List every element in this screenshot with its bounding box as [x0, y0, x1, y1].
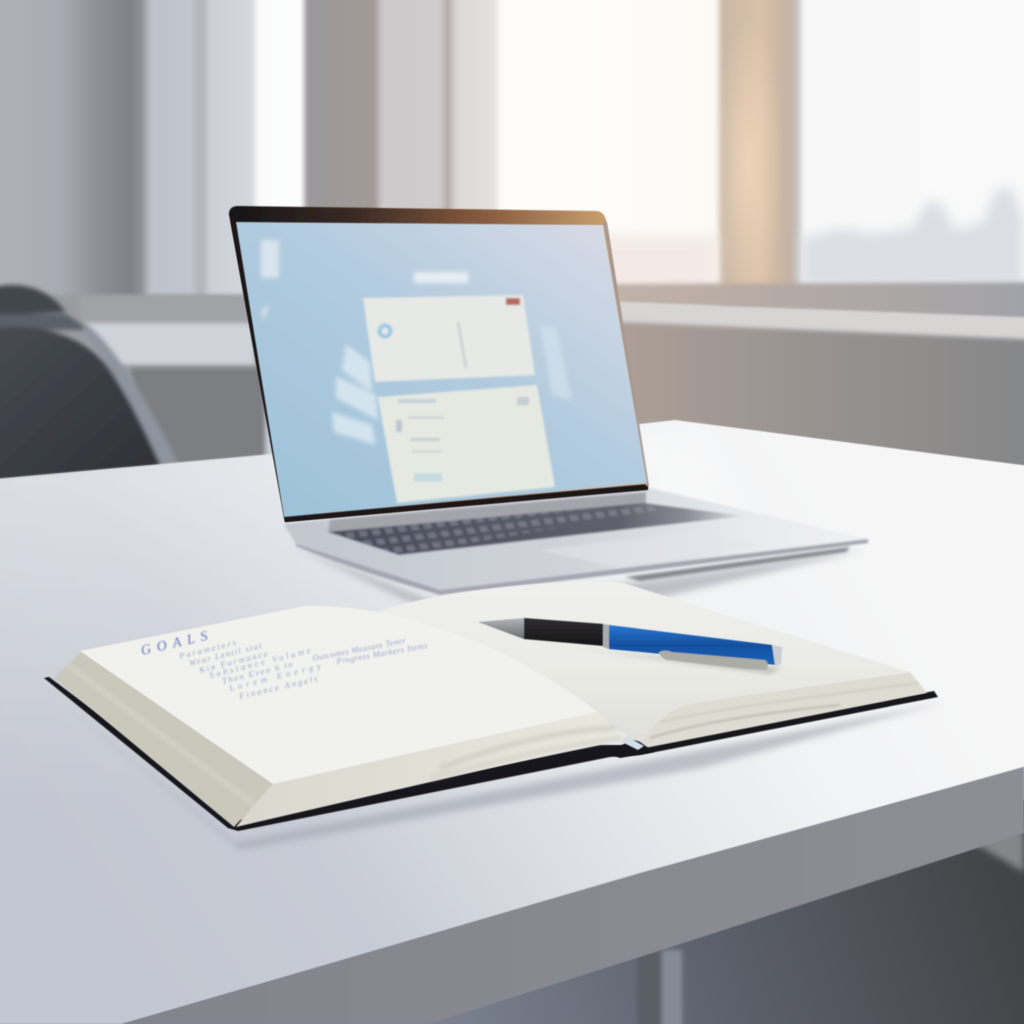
window sill and lower wall: [80, 282, 1024, 480]
handwritten list: Substance Volume: [208, 645, 312, 680]
screen card upper: [363, 295, 535, 382]
handwritten list: Outcomes Measure Tener: [311, 635, 407, 663]
spine page highlight: [622, 738, 644, 750]
screen interface: [261, 240, 572, 445]
handwritten list: Parameters: [177, 637, 237, 661]
side block strata: [68, 665, 255, 805]
table leg: [637, 950, 682, 1024]
goals handwriting: [140, 629, 429, 701]
table highlight: [640, 440, 760, 580]
pen band: [603, 624, 610, 649]
left page bottom block: [236, 712, 623, 827]
pen shadow: [525, 642, 782, 674]
laptop screen: [236, 222, 647, 517]
office chair: [0, 285, 178, 485]
handwritten list: [177, 635, 429, 701]
pen tip: [478, 618, 524, 639]
handwritten list: Lorem Energy: [227, 660, 322, 693]
lid right edge: [603, 220, 649, 486]
handwritten list: Finance Angels: [237, 673, 319, 701]
lid left and lower bezel: [229, 213, 648, 522]
right page strata: [650, 683, 918, 738]
pen: [478, 618, 782, 674]
laptop shadow: [290, 545, 866, 612]
left page side block: [54, 651, 273, 827]
handwritten list: Wear Lentil stat: [188, 640, 263, 668]
table front edge: [122, 767, 1024, 1024]
floor under table: [0, 800, 1024, 1024]
screen card lower: [378, 385, 555, 503]
pen grip: [524, 618, 604, 646]
laptop base: [284, 487, 868, 595]
room background wall and window columns: [0, 0, 1024, 495]
table: [0, 420, 1024, 1024]
notebook shadow: [44, 688, 945, 850]
window pane centre lower tint: [500, 235, 718, 297]
notebook cover: [44, 677, 938, 831]
laptop lid: [229, 206, 648, 522]
table surface: [0, 420, 1024, 1024]
handwritten list: Progress Markers Items: [335, 640, 429, 666]
notebook: [44, 582, 945, 850]
sun glow on frame: [712, 15, 784, 315]
right page block edge: [620, 672, 927, 748]
pen clip: [659, 650, 768, 670]
left page bottom strata: [430, 728, 622, 778]
left page: [80, 606, 598, 784]
heading: GOALS: GOALS: [140, 629, 209, 659]
pen barrel: [609, 625, 777, 665]
laptop: [229, 206, 868, 612]
handwritten list: Kin Formance: [197, 648, 269, 675]
distant city in right pane: [802, 186, 1024, 286]
right page: [378, 582, 910, 745]
handwritten list: Then Even 6 in: [221, 659, 293, 686]
spine: [612, 741, 654, 758]
pen end cap: [772, 645, 782, 666]
table surface top light: [0, 424, 640, 800]
